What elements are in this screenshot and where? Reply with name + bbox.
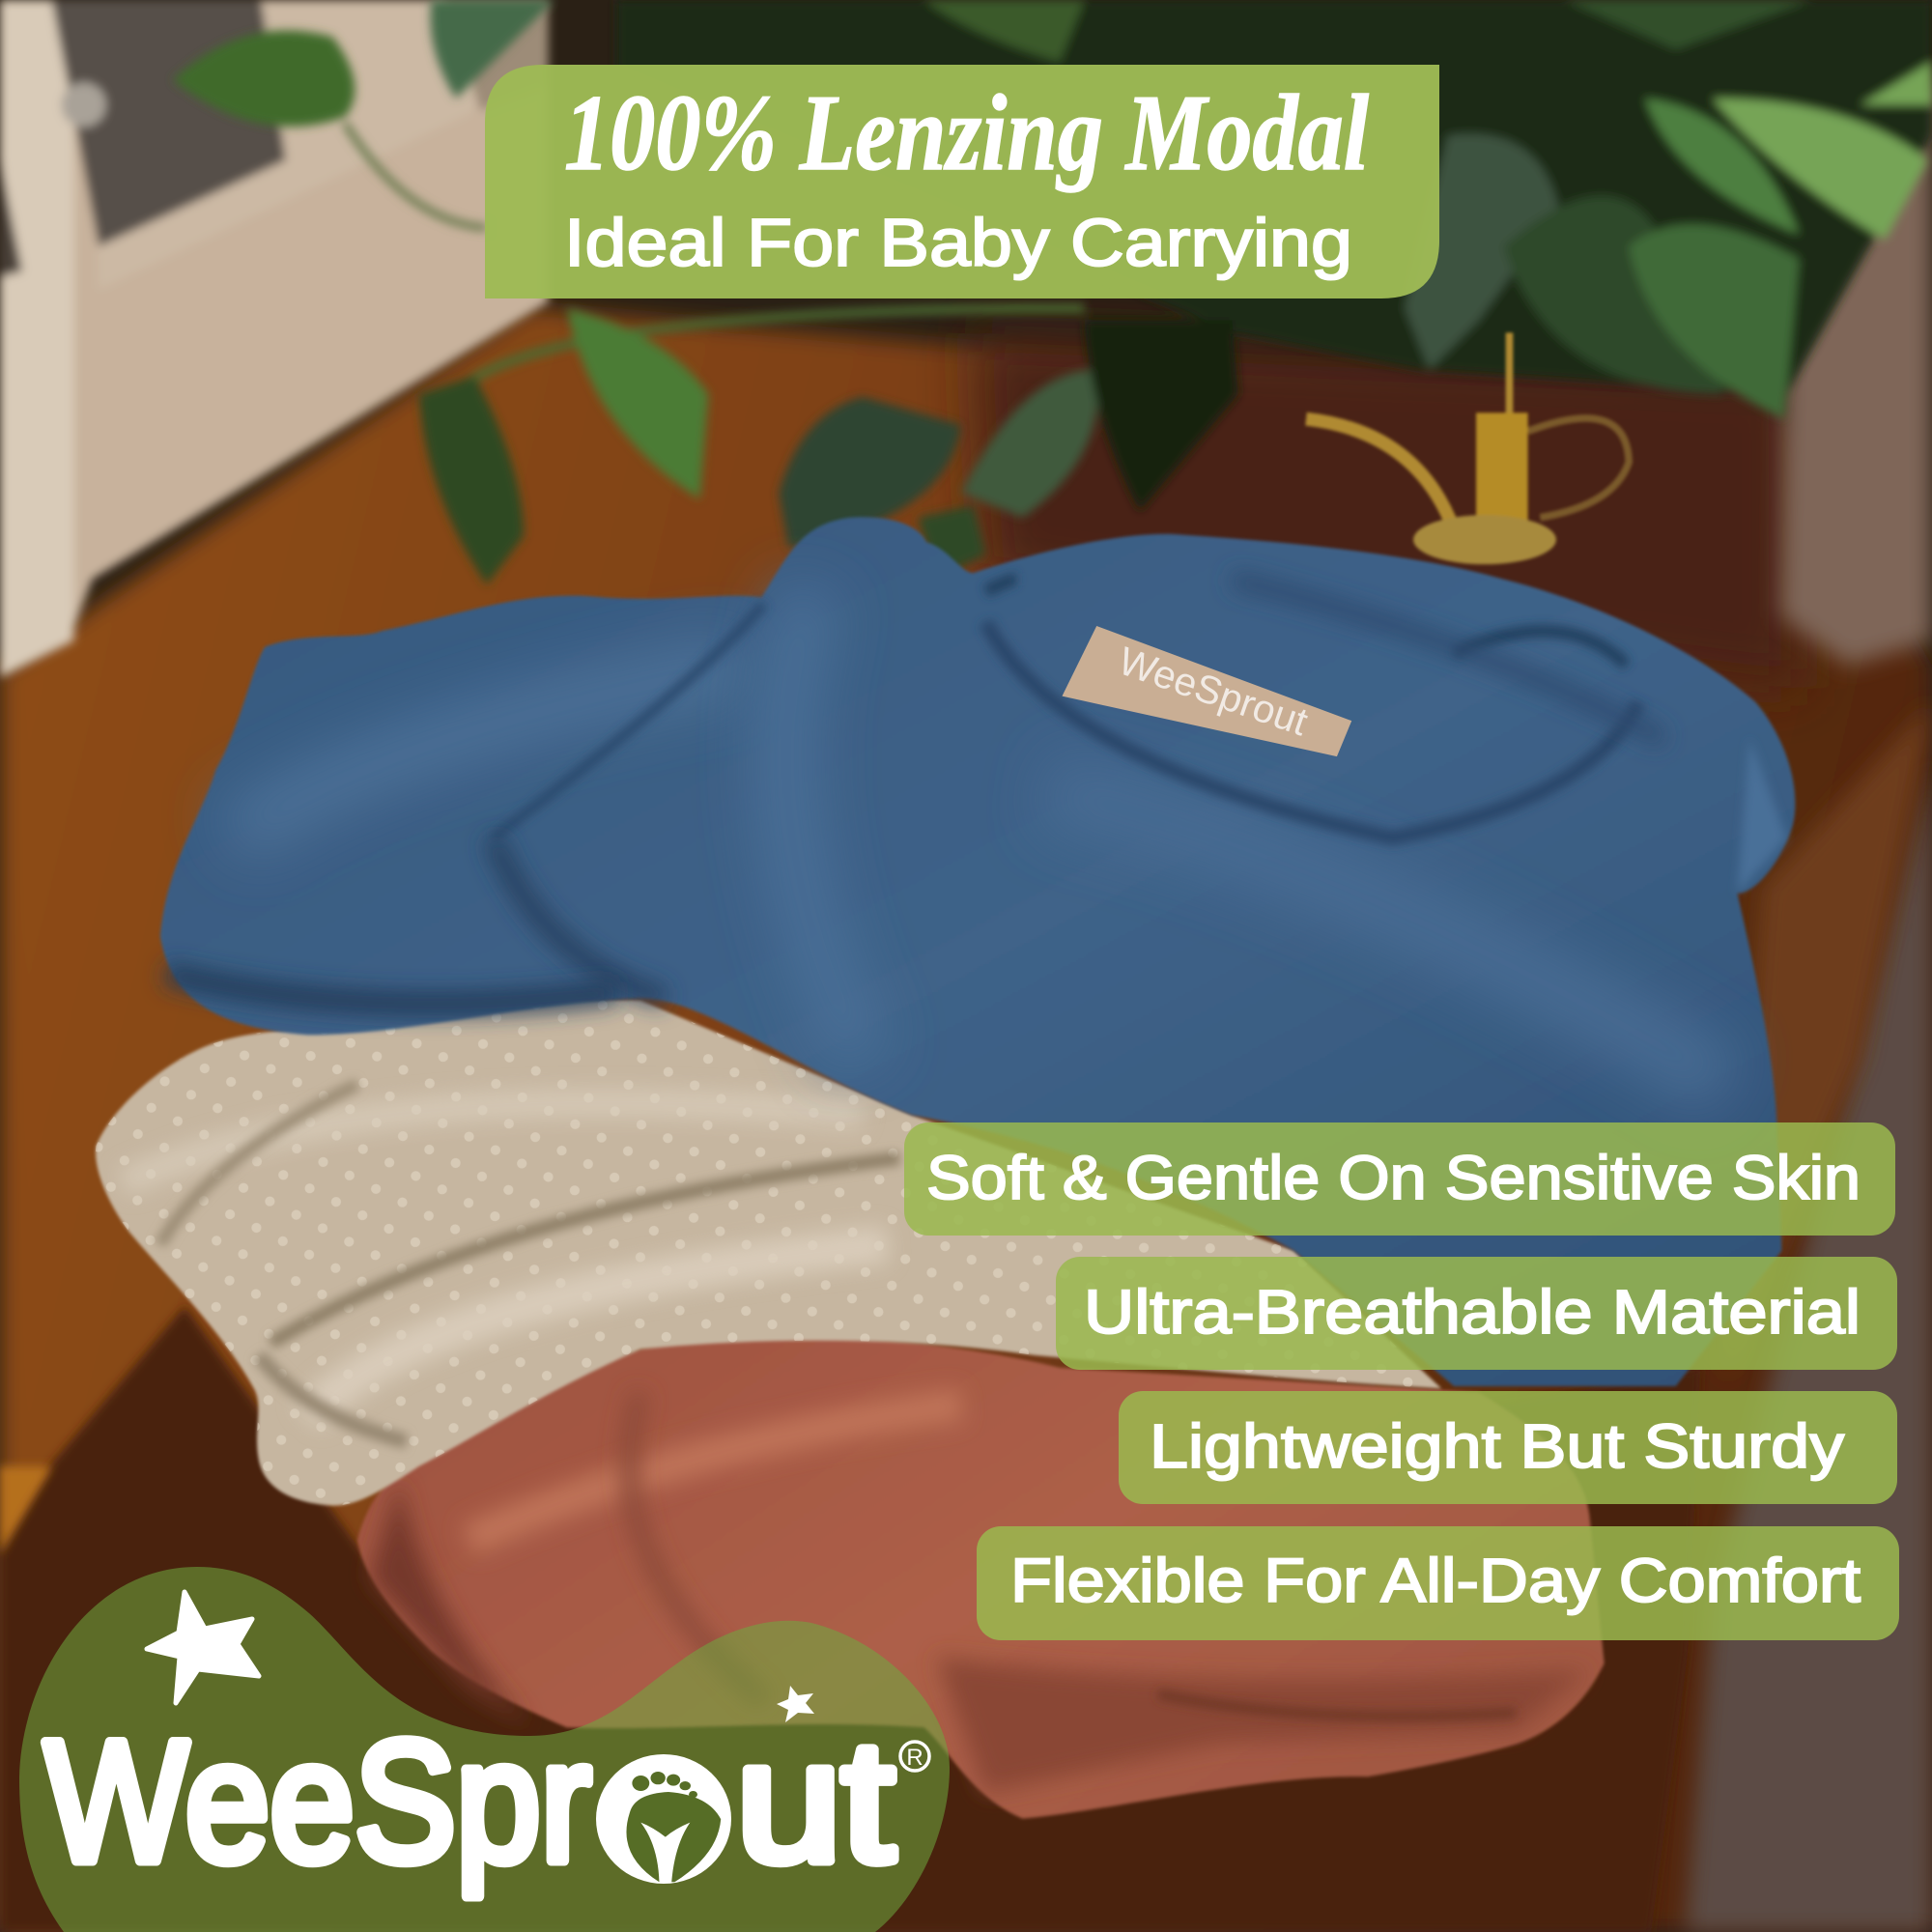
headline script text: 100% Lenzing Modal <box>564 73 1369 193</box>
feature pill: flexible: Flexible For All-Day Comfort <box>1010 1546 1861 1615</box>
feature pill: lightweight <box>1119 1391 1897 1504</box>
sewn fabric label <box>1062 626 1351 756</box>
beige throw at right <box>1780 74 1932 666</box>
small star <box>777 1686 814 1722</box>
registered mark <box>900 1742 929 1771</box>
terracotta blanket <box>357 1334 1605 1819</box>
feature pill: flexible <box>977 1526 1899 1640</box>
registered mark: R <box>906 1745 923 1771</box>
large star <box>147 1592 259 1703</box>
feature pill: breathable: Ultra-Breathable Material <box>1084 1277 1861 1347</box>
blue blanket <box>160 517 1795 1386</box>
door and wall <box>0 0 549 678</box>
dark table edge at lower left <box>0 1306 1700 1932</box>
dark shade behind plant <box>974 332 1799 690</box>
headline banner <box>485 65 1439 298</box>
logo wordmark: WeeSpr <box>44 1705 591 1897</box>
foliage <box>173 0 1932 585</box>
feature pill: soft and gentle: Soft & Gentle On Sensitive Skin <box>926 1143 1861 1212</box>
headline subtitle: Ideal For Baby Carrying <box>564 205 1352 280</box>
feature pill: breathable <box>1056 1257 1897 1370</box>
logo blob <box>19 1567 950 1932</box>
logo sprout icon <box>596 1754 731 1884</box>
feature pill: soft and gentle <box>904 1122 1895 1236</box>
beige polka-dot blanket <box>74 985 1466 1528</box>
WeeSprout logo badge <box>19 1567 950 1932</box>
sewn fabric label: WeeSprout <box>1113 639 1314 745</box>
logo wordmark: ut <box>736 1705 895 1897</box>
feature pill: lightweight: Lightweight But Sturdy <box>1150 1411 1844 1481</box>
logo wordmark: o <box>609 1705 704 1897</box>
brass watering can <box>1306 332 1629 564</box>
couch at right <box>1686 764 1932 1932</box>
